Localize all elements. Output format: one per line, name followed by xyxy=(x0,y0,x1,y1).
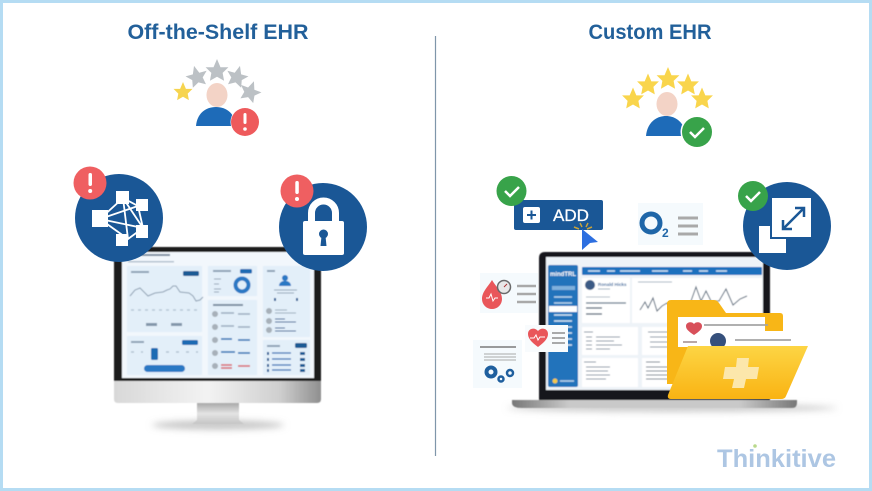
card: oxygen: 2 xyxy=(662,226,669,240)
plus sign xyxy=(723,358,759,388)
card: notes xyxy=(642,358,762,387)
card: record list xyxy=(582,327,638,355)
monitor stand xyxy=(192,403,244,424)
panel: tasks xyxy=(263,340,310,375)
laptop screen xyxy=(546,257,763,390)
patient record papers xyxy=(678,317,796,349)
laptop xyxy=(507,252,837,412)
panel: schedule xyxy=(127,336,202,375)
panel: donut xyxy=(208,266,257,296)
monitor bezel xyxy=(114,247,321,381)
card: heart rate xyxy=(525,325,568,352)
card: checklist xyxy=(642,327,762,355)
button: ADD: ADD xyxy=(553,206,589,225)
monitor chin xyxy=(114,381,321,403)
card: line chart xyxy=(632,278,762,323)
icon: cursor click xyxy=(574,223,598,250)
heading: Custom EHR: Custom EHR xyxy=(588,21,712,44)
laptop base xyxy=(512,400,797,408)
card: oxygen xyxy=(638,203,703,245)
card: patient details xyxy=(582,278,630,323)
card: patient details: Ronald Hicks xyxy=(598,282,627,287)
folder front xyxy=(668,346,808,399)
alert badge xyxy=(280,174,314,208)
icon: network nodes xyxy=(74,166,163,262)
alert badge xyxy=(74,166,106,200)
heading: Off-the-Shelf EHR: Off-the-Shelf EHR xyxy=(128,21,308,44)
center divider xyxy=(434,36,436,456)
panel: patient profile xyxy=(263,266,310,337)
card: medications xyxy=(582,358,638,387)
monitor shadow xyxy=(152,420,284,430)
button: ADD xyxy=(496,176,603,230)
logo: Thinkitive: Thinkitive xyxy=(717,445,836,473)
dashboard header xyxy=(128,254,174,262)
icon: good rating user xyxy=(622,67,714,148)
panel: vitals chart xyxy=(127,266,203,332)
check badge xyxy=(496,176,526,206)
icon: medical folder xyxy=(667,300,808,399)
icon: padlock xyxy=(279,174,367,271)
sidebar: mindTRL xyxy=(550,272,576,278)
laptop shadow xyxy=(507,404,837,412)
card: documents and gears xyxy=(473,340,522,388)
folder back xyxy=(667,300,783,384)
icon: poor rating user xyxy=(174,59,264,138)
panel: upcoming appointments xyxy=(208,300,257,375)
monitor screen xyxy=(122,252,314,378)
icon: expand window xyxy=(738,181,831,270)
top navigation bar xyxy=(582,267,762,275)
check badge xyxy=(738,181,768,211)
laptop lid xyxy=(539,252,770,402)
sidebar xyxy=(548,265,578,387)
desktop monitor xyxy=(114,247,321,430)
card: blood pressure xyxy=(480,273,538,313)
